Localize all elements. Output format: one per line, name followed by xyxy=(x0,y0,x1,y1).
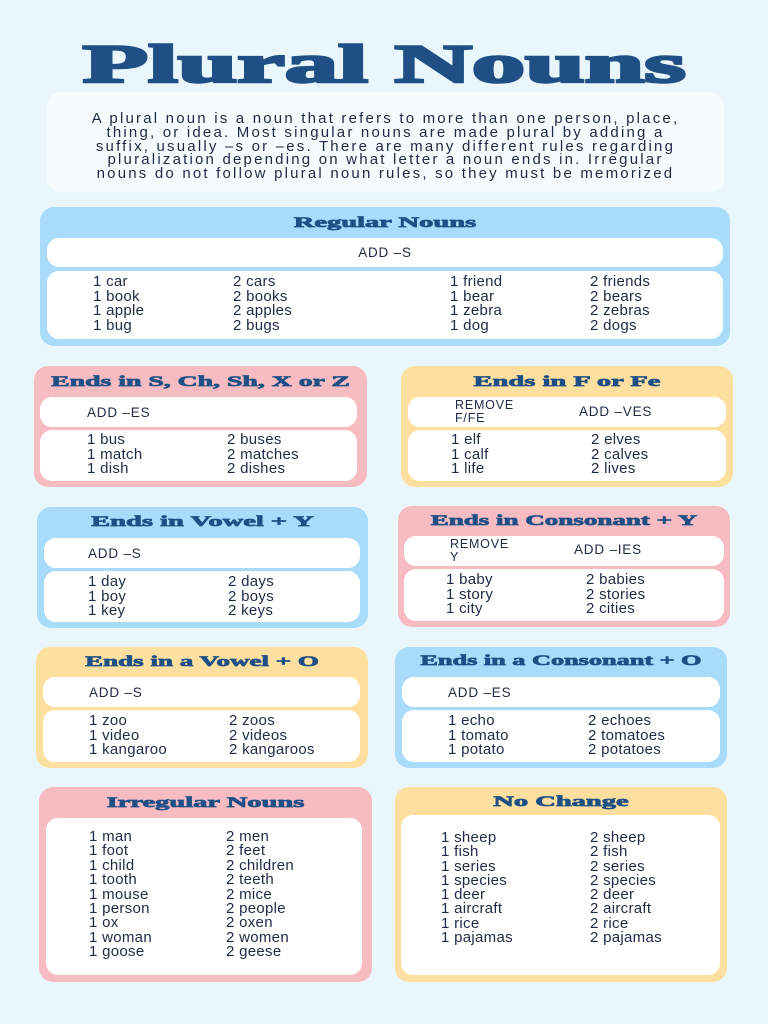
word list: 2 bears xyxy=(590,288,642,304)
word list: 2 deer xyxy=(590,886,634,903)
word list: 2 zebras xyxy=(590,302,650,319)
word list: 2 friends xyxy=(590,273,650,290)
word list: 2 buses xyxy=(227,431,282,448)
word list: 2 feet xyxy=(226,842,265,859)
panel: ends in s ch sh x z xyxy=(34,366,367,487)
word list: 1 match xyxy=(87,446,142,462)
word list: 1 calf xyxy=(451,446,489,462)
word list: 1 series xyxy=(441,858,496,875)
word list xyxy=(44,571,360,622)
rule: ADD –ES xyxy=(448,685,511,700)
heading: Irregular Nouns xyxy=(107,795,304,811)
word list: 1 key xyxy=(88,602,125,619)
intro text block: thing, or idea. Most singular nouns are made plural by adding a xyxy=(106,124,665,141)
word list: 1 mouse xyxy=(89,886,149,903)
word list: 1 child xyxy=(89,857,134,874)
panel: no change xyxy=(395,787,727,982)
word list: 2 lives xyxy=(591,460,636,477)
rule: REMOVE xyxy=(450,537,509,551)
panel: ends in f or fe xyxy=(401,366,733,487)
word list: 1 potato xyxy=(448,741,505,758)
heading: Ends in S, Ch, Sh, X or Z xyxy=(51,374,350,390)
rule xyxy=(408,397,726,427)
panel: ends in consonant + o xyxy=(395,647,727,768)
word list: 1 zebra xyxy=(450,302,502,319)
title: Plural Nouns xyxy=(82,34,686,94)
word list: 1 dog xyxy=(450,316,489,334)
word list: 1 friend xyxy=(450,273,502,290)
word list xyxy=(46,818,362,975)
word list: 1 city xyxy=(446,600,483,617)
word list: 1 bug xyxy=(93,316,132,334)
word list: 2 babies xyxy=(586,571,645,588)
word list: 2 days xyxy=(228,573,274,590)
rule: ADD –IES xyxy=(574,542,642,557)
panel: regular nouns xyxy=(40,207,730,346)
word list: 2 kangaroos xyxy=(229,741,315,758)
word list: 1 person xyxy=(89,900,150,917)
intro text block: suffix, usually –s or –es. There are many different rules regarding xyxy=(96,138,675,155)
panel: ends in consonant + y xyxy=(398,506,730,627)
rule: add -s xyxy=(47,238,723,267)
word list: 1 day xyxy=(88,573,126,590)
word list: 2 matches xyxy=(227,446,299,462)
word list: 1 bus xyxy=(87,431,125,448)
intro text block: nouns do not follow plural noun rules, so they must be memorized xyxy=(97,165,674,182)
word list: 1 aircraft xyxy=(441,900,502,917)
word list xyxy=(401,815,720,975)
heading: regular nouns: Regular Nouns xyxy=(294,215,476,231)
rule xyxy=(44,538,360,568)
rule: REMOVE xyxy=(455,398,514,412)
word list: 1 baby xyxy=(446,571,493,588)
word list: 2 rice xyxy=(590,915,628,932)
word list: 1 boy xyxy=(88,588,126,604)
word list: 1 foot xyxy=(89,842,128,859)
intro text block xyxy=(47,92,724,192)
word list: 1 fish xyxy=(441,843,479,860)
panel: ends in vowel + o xyxy=(36,647,368,768)
word list: 1 pajamas xyxy=(441,929,513,946)
word list xyxy=(47,271,723,339)
rule: ADD –S xyxy=(88,546,142,561)
word list: 2 aircraft xyxy=(590,900,651,917)
word list: 1 bear xyxy=(450,288,494,304)
word list: 1 elf xyxy=(451,431,481,448)
word list: 1 kangaroo xyxy=(89,741,167,758)
word list: 2 elves xyxy=(591,431,641,448)
intro text block: A plural noun is a noun that refers to more than one person, place, xyxy=(92,110,679,127)
word list: 2 teeth xyxy=(226,871,274,888)
word list: 1 woman xyxy=(89,929,152,946)
rule: add -s: ADD –S xyxy=(358,245,412,260)
rule: ADD –S xyxy=(89,685,143,700)
word list xyxy=(43,710,360,762)
word list: 2 zoos xyxy=(229,712,275,729)
word list: 1 apple xyxy=(93,302,144,319)
word list: 2 keys xyxy=(228,602,273,619)
word list: 1 sheep xyxy=(441,829,496,846)
rule xyxy=(402,677,720,707)
word list: 1 deer xyxy=(441,886,485,903)
word list: 2 echoes xyxy=(588,712,651,729)
word list: 1 life xyxy=(451,460,484,477)
word list: 2 books xyxy=(233,288,288,304)
word list: 1 species xyxy=(441,872,507,889)
word list: 2 bugs xyxy=(233,316,280,334)
word list: 2 geese xyxy=(226,943,281,960)
word list: 2 people xyxy=(226,900,286,917)
word list xyxy=(402,710,720,762)
word list: 1 book xyxy=(93,288,140,304)
word list: 1 zoo xyxy=(89,712,127,729)
word list xyxy=(40,430,357,481)
word list: 1 tomato xyxy=(448,726,509,744)
word list: 1 rice xyxy=(441,915,479,932)
word list: 2 dishes xyxy=(227,460,285,477)
rule xyxy=(40,397,357,427)
rule: Y xyxy=(450,550,459,564)
word list: 2 men xyxy=(226,828,269,845)
word list xyxy=(408,430,726,481)
heading: No Change xyxy=(493,794,629,810)
intro text block: pluralization depending on what letter a noun ends in. Irregular xyxy=(107,151,664,168)
word list: 1 man xyxy=(89,828,132,845)
word list: 1 goose xyxy=(89,943,144,960)
word list: 1 dish xyxy=(87,460,129,477)
word list: 1 tooth xyxy=(89,871,137,888)
word list xyxy=(404,569,724,621)
word list: 2 cars xyxy=(233,273,276,290)
word list: 1 echo xyxy=(448,712,495,729)
word list: 2 pajamas xyxy=(590,929,662,946)
word list: 2 cities xyxy=(586,600,635,617)
rule: ADD –VES xyxy=(579,404,652,419)
word list: 2 mice xyxy=(226,886,272,903)
word list: 2 stories xyxy=(586,586,645,602)
panel: ends in vowel + y xyxy=(37,507,368,628)
word list: 1 ox xyxy=(89,914,119,931)
rule xyxy=(43,677,360,707)
rule xyxy=(404,536,724,566)
word list: 1 story xyxy=(446,586,493,602)
word list: 2 sheep xyxy=(590,829,645,846)
heading: Ends in Vowel + Y xyxy=(91,514,314,530)
word list: 1 video xyxy=(89,726,139,744)
word list: 2 dogs xyxy=(590,316,637,334)
heading: Ends in Consonant + Y xyxy=(431,513,697,529)
word list: 2 boys xyxy=(228,588,274,604)
word list: 2 apples xyxy=(233,302,292,319)
word list: 2 fish xyxy=(590,843,628,860)
word list: 2 tomatoes xyxy=(588,726,665,744)
heading: Ends in F or Fe xyxy=(474,374,660,390)
word list: 2 potatoes xyxy=(588,741,661,758)
word list: 1 car xyxy=(93,273,128,290)
word list: 2 women xyxy=(226,929,289,946)
heading: Ends in a Vowel + O xyxy=(85,654,319,670)
panel: irregular nouns xyxy=(39,787,372,982)
word list: 2 series xyxy=(590,858,645,875)
rule: ADD –ES xyxy=(87,405,150,420)
heading: Ends in a Consonant + O xyxy=(420,653,702,669)
rule: F/FE xyxy=(455,411,485,425)
word list: 2 calves xyxy=(591,446,648,462)
word list: 2 species xyxy=(590,872,656,889)
word list: 2 oxen xyxy=(226,914,273,931)
word list: 2 children xyxy=(226,857,294,874)
word list: 2 videos xyxy=(229,726,287,744)
